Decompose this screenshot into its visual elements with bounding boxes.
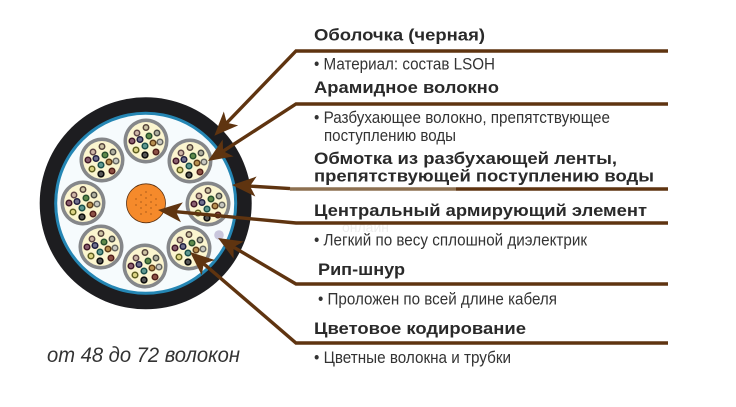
fiber tubes [60,118,230,288]
leader arrow [223,241,668,284]
description: • Проложен по всей длине кабеля [318,290,557,308]
description: • Разбухающее волокно, препятствующее [314,108,610,127]
heading [314,150,654,186]
heading: Оболочка (черная) [314,26,485,44]
description: • Материал: состав LSOH [314,54,495,74]
callout: color coding [195,256,668,367]
cable cross-section [40,97,252,309]
leader arrow [195,256,668,343]
callout: central strength member [164,202,668,250]
central strength member [126,184,166,223]
heading: Центральный армирующий элемент [314,202,647,220]
heading: препятствующей поступлению воды [314,168,654,186]
inner white core [57,115,234,292]
heading: Рип-шнур [318,261,405,279]
leader arrow [218,51,668,131]
leader arrow [238,185,668,189]
description: • Легкий по весу сплошной диэлектрик [314,230,588,250]
heading: Обмотка из разбухающей ленты, [314,150,617,168]
description [314,108,610,145]
caption: fiber count: от 48 до 72 волокон [47,344,240,367]
callout: sheath [218,26,668,131]
outer black sheath [40,97,252,309]
watermark: онлайн [342,219,389,235]
callout: water-swellable tape [238,150,668,189]
description: • Цветные волокна и трубки [314,348,511,367]
heading: Цветовое кодирование [314,320,526,338]
callout: aramid fiber [213,79,668,158]
description: поступлению воды [324,126,456,145]
leader arrow [213,104,668,158]
water-swellable tape ring [54,112,237,295]
heading: Арамидное волокно [314,79,499,97]
callout: rip cord [223,241,668,308]
leader arrow [164,211,668,223]
rip cord [214,230,224,240]
